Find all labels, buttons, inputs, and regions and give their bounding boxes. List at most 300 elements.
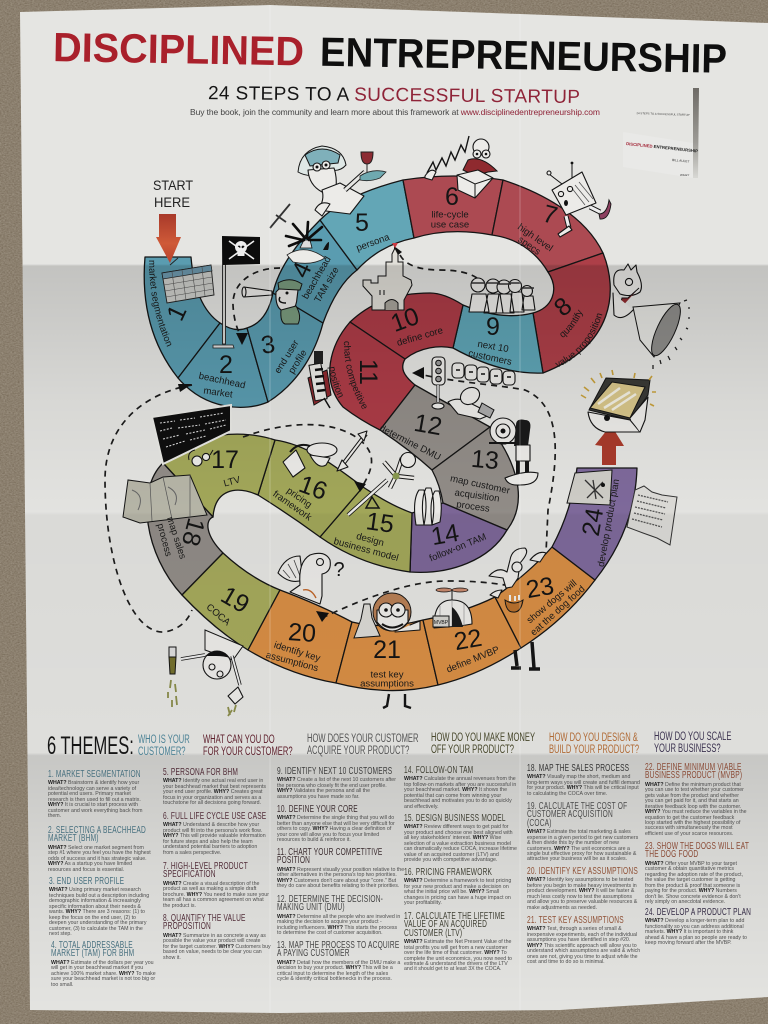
segment 15: [320, 487, 412, 572]
segment 2: [178, 323, 268, 407]
step 7 text: brochure. WHY? You need to make sure your: [163, 892, 269, 898]
step 13 label: [449, 445, 512, 515]
theme: build: HOW DO YOU DESIGN &: [549, 732, 638, 744]
segment 6: [403, 176, 503, 238]
icon: double headed arrow: [337, 431, 367, 471]
step 14 text: 14. FOLLOW-ON TAM: [404, 765, 473, 776]
step 13 label: acquisition: [454, 487, 500, 505]
step 24 label: [577, 478, 622, 568]
step 6 text: WHAT? Understand & describe how your: [163, 822, 259, 828]
step 7 text: the product is.: [163, 903, 196, 909]
icon: red start arrow: [156, 214, 181, 263]
step 3 text: keep the focus on the end user, (2) to: [49, 915, 136, 921]
step 8 text: 8. QUANTIFY THE VALUE: [163, 913, 246, 924]
segment 20: [248, 590, 352, 683]
step 2 label: 2: [219, 351, 233, 379]
step 21 text: assumptions you have identified in step #20.: [527, 937, 630, 943]
theme: scale: YOUR BUSINESS?: [654, 743, 721, 755]
step 5 text: focus in your organization and serves as a: [163, 795, 261, 801]
step 19 text: WHAT? Estimate the total marketing & sales: [527, 829, 631, 835]
step 16 text: WHAT? Determine a framework to test pricing: [404, 878, 511, 884]
step 17 text: complete the unit economics, you now need to: [404, 956, 512, 962]
main title: DISCIPLINED: [53, 24, 304, 74]
step 21 text: [527, 915, 640, 965]
icon: pirate flag: [213, 236, 260, 348]
step 9 text: WHAT? Create a list of the next 10 customers after: [277, 777, 396, 783]
step 4 label: beachhead: [300, 255, 334, 301]
dashed connector paths: [105, 246, 555, 632]
step 18 text: to calculating the COCA over time.: [527, 791, 607, 797]
step 22 text: BUSINESS PRODUCT (MVBP): [645, 770, 742, 781]
icon: scientist legs: [383, 694, 411, 708]
step 17 text: [404, 911, 512, 972]
step 14 text: [404, 765, 516, 810]
step 15 text: [404, 813, 517, 863]
step 2 text: [48, 825, 151, 873]
step 24 text: [645, 907, 751, 946]
book cover image: 24 STEPS TO A SUCCESSFUL STARTUP: [636, 111, 690, 117]
step 4 label: 4: [286, 258, 318, 282]
step 3 label: end user: [272, 338, 302, 376]
icon: crowd below segment 9: [452, 363, 515, 385]
segment 23: [495, 547, 595, 648]
step 10 text: your core will allow you to focus your limited: [277, 832, 379, 838]
theme: scale: [654, 731, 732, 755]
icon: small sword: [270, 204, 290, 228]
step 23 text: paying for the product. WHY? Numbers: [645, 888, 737, 894]
icon: robot spec sheet: [547, 162, 611, 237]
icon: character with price sign: [283, 443, 337, 477]
icon: pencil and triangle: [348, 480, 387, 515]
step 9 text: WHY? Validates the persona and all the: [277, 788, 370, 794]
step 3 text: [49, 876, 149, 937]
step 10 label: define core: [396, 325, 444, 349]
step 1 text: 1. MARKET SEGMENTATION: [48, 769, 141, 780]
step 7 label: [515, 200, 560, 258]
step 12 text: WHAT? Determine all the people who are involved in: [277, 914, 400, 920]
start here label: HERE: [154, 194, 190, 210]
segment 7: [492, 180, 603, 272]
segment 4: [273, 220, 357, 323]
segment 14: [410, 503, 507, 572]
step 10 text: resources to build & reinforce it.: [277, 837, 351, 843]
step 23 text: [645, 841, 749, 905]
step 11 text: they do care about benefits relating to their priorities.: [277, 883, 399, 889]
step 23 label: eat the dog food: [529, 584, 587, 638]
step 14 text: WHAT? Calculate the annual revenues from the: [404, 776, 516, 782]
step 15 text: all key stakeholders' interest. WHY? Wise: [404, 835, 501, 841]
step 23 label: 23: [524, 572, 556, 604]
step 7 label: 7: [540, 200, 560, 230]
step 14 text: and effectively.: [404, 804, 439, 810]
step 3 text: techniques build out a description including: [49, 893, 149, 899]
step 22 text: [645, 762, 747, 837]
step 20 text: make adjustments as needed.: [527, 905, 597, 911]
icon: red arrow to treasure: [595, 425, 624, 465]
step 2 text: MARKET (BHM): [48, 833, 99, 844]
segment 21: [336, 620, 438, 691]
step 4 label: TAM size: [312, 265, 342, 305]
step 2 label: market: [203, 386, 234, 401]
step 1 text: [48, 769, 143, 819]
step 16 label: [271, 470, 331, 523]
step 3 text: WHAT? Using primary market research: [49, 887, 141, 893]
step 4 text: [51, 940, 156, 988]
step 1 text: them.: [48, 813, 61, 819]
step 24 text: 24. DEVELOP A PRODUCT PLAN: [645, 907, 751, 918]
step 15 label: business model: [332, 536, 400, 564]
step 14 label: 14: [429, 519, 461, 551]
game board road: [144, 176, 637, 691]
step 24 label: develop product plan: [596, 478, 622, 568]
step 2 text: odds of success and it has strategic value.: [48, 856, 147, 862]
website line: Buy the book, join the community and learn more about this framework at www.disciplinedentrepreneurship.com: [190, 107, 600, 117]
book cover image: BILL AULET: [672, 158, 690, 164]
step 1 label: 1: [161, 301, 193, 325]
step 14 text: potential that can come from winning your: [404, 793, 501, 799]
step 12 text: MAKING UNIT (DMU): [277, 902, 345, 913]
step 5 text: your beachhead market that best represents: [163, 784, 266, 790]
question mark: ?: [333, 559, 345, 581]
icon: dog legs under road: [511, 642, 540, 669]
segment 18: [147, 463, 223, 595]
step 8 text: show it.: [163, 955, 181, 961]
step 7 label: high level: [515, 222, 555, 254]
segment 10: [350, 293, 463, 359]
step 23 text: THE DOG FOOD: [645, 849, 698, 860]
step 18 text: for your product. WHY? This will be critical input: [527, 785, 639, 791]
step 19 text: expense in a given period to get new customers: [527, 835, 638, 841]
step 17 text: over the life time of that customer. WHY? To: [404, 950, 507, 956]
step 22 text: equation to get the customer feedback: [645, 815, 734, 821]
step 9 text: the persona who closely fit the end user profile.: [277, 783, 387, 789]
step 22 label: [445, 624, 501, 676]
step 22 text: gets value from the product and whether: [645, 793, 739, 799]
themes legend: [47, 731, 732, 760]
step 20 text: much less costly now to test the assumptions: [527, 894, 632, 900]
step 20 text: product development. WHY? It will be faster &: [527, 888, 634, 894]
step 13 label: map customer: [449, 473, 512, 497]
step 3 text: customer, (3) to calculate the TAM in the: [49, 926, 143, 932]
step 17 text: 17. CALCULATE THE LIFETIME: [404, 911, 505, 922]
step 11 text: [277, 847, 404, 889]
step 16 label: pricing: [284, 485, 314, 511]
step 15 text: provide you with competitive advantage.: [404, 857, 497, 863]
icon: folded map: [123, 475, 207, 523]
step 21 label: assumptions: [360, 678, 414, 690]
step 19 text: CUSTOMER ACQUISITION: [527, 809, 613, 820]
step 8 text: WHAT? Summarize in as concrete a way as: [163, 933, 266, 939]
step 19 text: & then divide this by the number of new: [527, 840, 619, 846]
icon: treasure chest: [581, 370, 656, 432]
step 17 text: and it should get to at least 3X the COCA.: [404, 966, 501, 972]
step 18 label: process: [154, 522, 174, 558]
step 11 text: POSITION: [277, 855, 310, 866]
step 6 text: product will fit into the persona's work flow.: [163, 828, 262, 834]
step 17 text: WHAT? Estimate the Net Present Value of the: [404, 939, 511, 945]
theme: acquire: HOW DOES YOUR CUSTOMER: [307, 733, 418, 745]
step 19 label: [204, 581, 254, 629]
icon: dog and bowl: [489, 548, 546, 612]
step 2 text: WHAT? Select one market segment from: [48, 845, 144, 851]
step 15 text: value of an acquired customer (LTV) and: [404, 852, 499, 858]
step 3 label: [259, 330, 310, 376]
theme: who: [138, 734, 190, 758]
icon: character stack beside segment 11: [308, 351, 331, 408]
step 20 label: [265, 618, 322, 674]
step 13 text: WHAT? Detail how the members of the DMU make a: [277, 960, 400, 966]
theme: money: [431, 732, 535, 756]
theme: scale: HOW DO YOU SCALE: [654, 731, 731, 743]
step 20 text: [527, 866, 638, 911]
step 2 text: resources and focus is essential.: [48, 867, 124, 873]
icon: megaphone man: [613, 264, 690, 369]
step 2 text: step #1 where you feel you have the highest: [48, 850, 151, 856]
step 8 label: value proposition: [555, 314, 602, 367]
step 8 text: [163, 913, 271, 961]
step 12 text: making the decision to acquire your product -: [277, 919, 382, 925]
step 7 text: [163, 861, 269, 909]
step 10 text: WHAT? Determine the single thing that you will do: [277, 815, 394, 821]
step 9 text: assumptions you have made so far.: [277, 794, 360, 800]
step 5 text: your end user profile. WHY? Creates great: [163, 789, 263, 795]
icon: traffic light: [432, 357, 445, 409]
step 17 label: 17: [211, 446, 239, 474]
step 3 text: wants. WHY? There are 3 reasons: (1) to: [49, 909, 145, 915]
segment 8: [533, 253, 610, 373]
step 3 text: demographic information & increasingly: [49, 898, 141, 904]
step 22 text: iterative feedback loop with the customer.: [645, 804, 741, 810]
book cover image: DISCIPLINED ENTREPRENEURSHIP: [626, 141, 698, 154]
start here label: [153, 177, 193, 210]
step 8 label: quantify: [560, 310, 584, 338]
step 16 text: for your new product and make a decision on: [404, 884, 509, 890]
step 16 label: 16: [295, 470, 331, 506]
step 24 text: WHAT? Develop a longer-term plan to add: [645, 918, 744, 924]
icon: crowd behind segment 9: [469, 278, 535, 313]
step 2 label: [198, 351, 246, 401]
theme: money: OFF YOUR PRODUCT?: [431, 744, 514, 756]
step 6 label: [431, 183, 469, 230]
theme: build: [549, 732, 639, 756]
step 23 text: don't lie. Show concrete evidence & don't: [645, 894, 741, 900]
step 23 text: regarding the adoption rate of the product,: [645, 872, 743, 878]
step 11 label: position: [327, 366, 343, 398]
step 15 text: your product and choose one best aligned with: [404, 830, 513, 836]
segment 13: [432, 427, 518, 530]
icon: palm island with shark fin: [286, 222, 329, 263]
step 7 text: team all has a common agreement on what: [163, 897, 264, 903]
step 22 text: efficient use of your scarce resources.: [645, 831, 733, 837]
step 21 label: [360, 636, 414, 690]
step 13 label: 13: [470, 445, 500, 475]
step 4 text: too small.: [51, 982, 73, 988]
step 6 text: for future steps and also help the team: [163, 839, 253, 845]
step 18 label: 18: [176, 515, 210, 549]
step 1 label: market segmentation: [149, 260, 172, 347]
step 4 text: achieve 100% market share. WHY? To make: [51, 971, 156, 977]
segment 17: [163, 434, 275, 517]
icon: jack in the box: [425, 136, 497, 198]
step 4 text: 4. TOTAL ADDRESSABLE: [51, 940, 133, 951]
segment 3: [247, 293, 323, 402]
step 19 text: attractive your business will be as it scales.: [527, 856, 627, 862]
step 20 label: assumptions: [265, 650, 320, 674]
step 10 label: 10: [387, 302, 423, 338]
step 18 text: [527, 763, 640, 797]
icon: castle: [363, 243, 412, 310]
icon: upside-down man with bottle: [168, 630, 243, 716]
step 8 text: PROPOSITION: [163, 921, 211, 932]
step 11 label: 11: [354, 359, 382, 385]
icon: pirate with telescope: [242, 280, 302, 324]
step 5 text: touchstone for all decisions going forward.: [163, 800, 261, 806]
step 17 text: total profits you will get from a new customer: [404, 945, 508, 951]
step descriptions: [48, 762, 751, 988]
step 10 text: better than anyone else that will be very difficult for: [277, 821, 395, 827]
step 21 text: cost and time to do so is minimal.: [527, 959, 605, 965]
step 8 text: possible the value your product will create: [163, 938, 260, 944]
step 6 text: from a sales perspective.: [163, 850, 221, 856]
step 1 label: [149, 260, 193, 347]
step 5 text: [163, 767, 266, 806]
step 8 label: 8: [549, 292, 577, 322]
step 5 text: WHAT? Identify one actual real end user in: [163, 778, 263, 784]
step 3 label: 3: [259, 330, 277, 360]
step 18 label: [154, 515, 210, 561]
step 6 label: life-cycle: [431, 210, 469, 220]
step 3 text: specific information about their needs &: [49, 904, 141, 910]
step 16 text: your profitability.: [404, 900, 442, 906]
step 12 text: to determine the cost of customer acquisition.: [277, 930, 383, 936]
step 22 text: 22. DEFINE MINIMUM VIABLE: [645, 762, 742, 773]
icon: blackboard: [152, 405, 231, 464]
step 11 label: chart competitive: [344, 341, 366, 410]
step 13 label: process: [456, 499, 491, 515]
step 16 text: [404, 867, 511, 906]
step 6 label: use case: [431, 220, 469, 230]
step 22 text: WHY? You must reduce the variables in the: [645, 809, 747, 815]
step 9 text: 9. IDENTIFY NEXT 10 CUSTOMERS: [277, 766, 392, 777]
step 21 text: understand which assumptions are valid & which: [527, 948, 640, 954]
theme: acquire: [307, 733, 418, 757]
step 16 text: 16. PRICING FRAMEWORK: [404, 867, 492, 878]
step 17 text: CUSTOMER (LTV): [404, 928, 462, 939]
step 16 text: changes in pricing can have a huge impact on: [404, 895, 511, 901]
icon: glasses on segment 17: [189, 450, 213, 466]
main title: ENTREPRENEURSHIP: [320, 29, 727, 82]
step 20 text: and allow you to preserve valuable resources &: [527, 899, 637, 905]
step 8 text: for the target customer. WHY? Customers buy: [163, 944, 271, 950]
icon: persona character with wine glass: [298, 146, 386, 216]
step 12 text: including influencers. WHY? This starts the process: [277, 925, 397, 931]
step 9 label: next 10: [477, 339, 509, 355]
step 20 text: 20. IDENTIFY KEY ASSUMPTIONS: [527, 866, 638, 877]
theme: acquire: ACQUIRE YOUR PRODUCT?: [307, 745, 409, 757]
step 4 text: WHAT? Estimate of the dollars per year you: [51, 960, 154, 966]
step 14 text: top follow-on markets after you are successful in: [404, 782, 516, 788]
step 7 text: 7. HIGH-LEVEL PRODUCT: [163, 861, 248, 872]
step 20 label: identify key: [272, 640, 322, 664]
icon: calendar matrix: [162, 258, 214, 303]
step 3 text: next step.: [49, 931, 72, 937]
step 20 text: before you begin to make heavy investments in: [527, 883, 637, 889]
start here label: START: [153, 177, 193, 193]
step 9 label: customers: [467, 348, 513, 368]
step 17 label: [211, 446, 242, 489]
step 21 text: 21. TEST KEY ASSUMPTIONS: [527, 915, 624, 926]
step 13 text: cycle & identify critical bottlenecks in the process.: [277, 976, 392, 982]
step 3 text: 3. END USER PROFILE: [49, 876, 124, 887]
theme: what: [203, 734, 293, 758]
segment 16: [258, 440, 363, 537]
step 16 label: framework: [271, 489, 314, 523]
step 4 text: MARKET (TAM) FOR BHM: [51, 948, 134, 959]
theme: build: BUILD YOUR PRODUCT?: [549, 744, 639, 756]
step 15 text: 15. DESIGN BUSINESS MODEL: [404, 813, 506, 824]
step 21 text: inexpensive experiments, each of the individual: [527, 932, 637, 938]
step 20 text: WHAT? Identify key assumptions to be tested: [527, 877, 633, 883]
step 21 label: 21: [373, 636, 401, 664]
step 14 label: follow-on TAM: [428, 532, 488, 564]
step 15 text: WHAT? Review different ways to get paid for: [404, 824, 509, 830]
step 4 text: will get in your beachhead market if you: [51, 965, 143, 971]
step 18 text: 18. MAP THE SALES PROCESS: [527, 763, 629, 774]
step 17 label: LTV: [222, 474, 242, 489]
step 9 label: [467, 313, 513, 368]
step 14 text: your beachhead market. WHY? It shows the: [404, 787, 507, 793]
step 3 label: profile: [286, 348, 310, 376]
step 13 text: decision to buy your product. WHY? This will be a: [277, 965, 393, 971]
step 23 text: WHAT? Offer your MVBP to your target: [645, 861, 737, 867]
step 24 text: markets. WHY? It is important to think: [645, 929, 733, 935]
step 6 text: understand potential barriers to adoption: [163, 844, 257, 850]
icon: document on segment 24: [567, 470, 612, 505]
subtitle: 24 STEPS TO A SUCCESSFUL STARTUP: [208, 83, 580, 108]
step 5 label: persona: [355, 232, 392, 254]
step 13 text: A PAYING CUSTOMER: [277, 948, 350, 959]
step 22 label: define MVBP: [445, 644, 501, 676]
step 7 text: product as well as making a simple draft: [163, 886, 256, 892]
icon: skeleton figure: [384, 452, 416, 488]
segment 1: [144, 257, 220, 378]
step 2 label: beachhead: [198, 371, 246, 391]
segment 12: [380, 385, 490, 470]
step 13 text: 13. MAP THE PROCESS TO ACQUIRE: [277, 940, 399, 951]
step 9 label: 9: [486, 313, 500, 341]
step 9 text: [277, 766, 396, 800]
step 19 label: COCA: [204, 602, 233, 629]
step 1 text: research is then used to fill out a matrix.: [48, 797, 141, 803]
step 7 text: SPECIFICATION: [163, 869, 216, 880]
segment 11: [330, 322, 415, 430]
step 5 text: 5. PERSONA FOR BHM: [163, 767, 238, 778]
step 2 text: WHY? As a startup you have limited: [48, 861, 132, 867]
step 24 text: keep moving forward after the MVBP.: [645, 940, 732, 946]
step 18 text: long-term ways you will create and fulfill demand: [527, 780, 640, 786]
theme: money: HOW DO YOU MAKE MONEY: [431, 732, 535, 744]
segment 22: [423, 597, 521, 685]
theme: what: WHAT CAN YOU DO: [203, 734, 275, 746]
step 15 text: selection of a value extraction business model: [404, 841, 511, 847]
icon: winged thinker: [278, 553, 330, 604]
step 12 label: 12: [412, 409, 444, 441]
step 23 label: show dogs will: [525, 578, 579, 626]
step 15 text: can dramatically reduce COCA, increase lifetime: [404, 846, 517, 852]
step 13 text: critical input to determine the length of the sales: [277, 971, 388, 977]
book cover image: [623, 88, 699, 178]
step 7 label: specs: [516, 234, 543, 258]
